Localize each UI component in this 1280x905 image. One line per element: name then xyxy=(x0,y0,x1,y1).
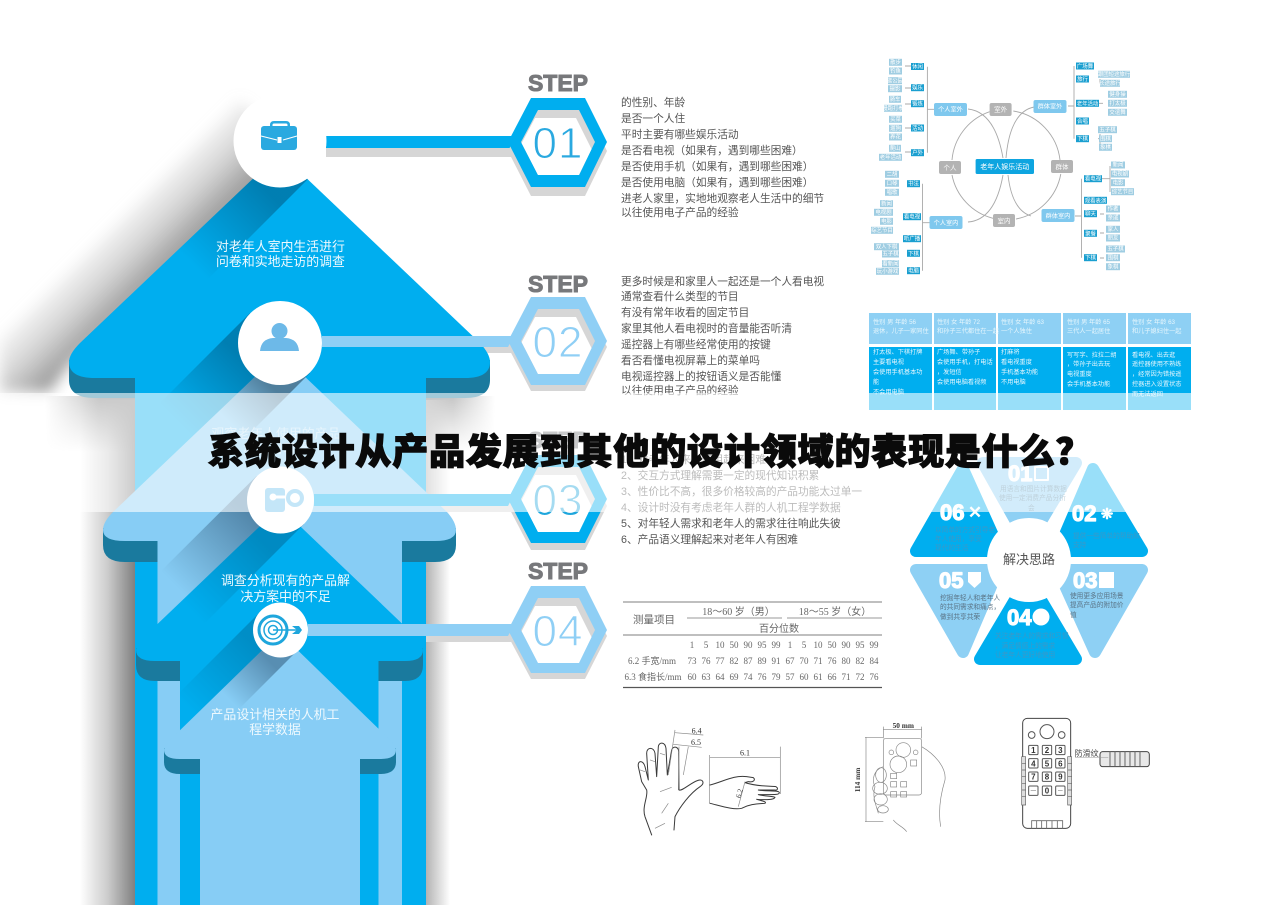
connector 1 xyxy=(326,136,516,148)
remote control drawing: 0 xyxy=(1045,787,1050,796)
wheel descriptions: 用语言和图片计算数据 xyxy=(1000,484,1067,493)
pale leaf labels: 围棋 xyxy=(1108,253,1119,261)
handheld grip drawing: 50 mm xyxy=(893,721,914,730)
wheel descriptions: 使用一定消费产品分析 xyxy=(999,493,1066,502)
arrow text 3 xyxy=(221,573,350,604)
arrow 1 (top, blue) xyxy=(69,153,490,905)
persona header text: 三代人一起居住 xyxy=(1067,327,1110,335)
circle 4 with target icon xyxy=(253,602,308,658)
step 1 hexagon: 01 xyxy=(533,119,583,168)
shadow of circle 3 on arrow 2 xyxy=(170,476,304,588)
segment 01 xyxy=(983,463,1076,543)
arrow 4 (light blue) xyxy=(164,633,396,905)
step 3 list: 1、对老年人来说使用起来困难 xyxy=(621,453,766,466)
persona body text: 会使用电脑看视频 xyxy=(937,378,986,386)
handheld grip drawing: 114 mm xyxy=(853,768,862,792)
pale leaf labels: 打太极 xyxy=(1109,99,1126,107)
measurement table: 76 xyxy=(758,672,767,682)
dark leaf labels: 电脑 xyxy=(908,267,919,275)
step 2 hexagon xyxy=(508,297,607,391)
arrow text 2 (faded) xyxy=(212,426,340,456)
circle 3 with GO key icon xyxy=(247,466,314,534)
dark leaf labels: 户外 xyxy=(912,149,923,157)
pale leaf labels: 亲戚 xyxy=(1108,214,1119,222)
wheel numbers: 01 xyxy=(1008,461,1032,486)
circle 2 with person icon xyxy=(238,301,322,385)
dark leaf labels: 活动 xyxy=(912,124,923,132)
arrow text 4 xyxy=(211,707,340,737)
mind map arcs xyxy=(905,66,1110,271)
persona header text: 一个人独住 xyxy=(1001,327,1032,335)
mind map: elderly leisure activities xyxy=(871,58,1134,275)
pale leaf labels: 电视剧 xyxy=(875,208,892,216)
persona body text: 打麻将 xyxy=(1001,348,1020,356)
light blue node labels xyxy=(934,102,1070,227)
step 1 list: 是否使用手机（如果有，遇到哪些困难） xyxy=(621,160,813,173)
dark leaf labels: 聚餐 xyxy=(1085,229,1096,237)
measurement table: 测量项目 xyxy=(633,613,675,626)
remote control drawing xyxy=(1022,718,1149,828)
step 1 list: 的性别、年龄 xyxy=(621,96,685,109)
step 2 hexagon: 02 xyxy=(533,318,583,367)
step 2 list: 有没有常年收看的固定节目 xyxy=(621,306,749,319)
step 4 label: STEP xyxy=(528,558,588,584)
measurement table: 18～55 岁（女） xyxy=(799,605,871,618)
pale leaf labels: 遛狗 xyxy=(890,124,901,132)
step 3 label: STEP xyxy=(528,427,588,453)
wheel descriptions: 关注老年人的需求和习惯 xyxy=(995,631,1069,640)
dark leaf labels: 合唱 xyxy=(1077,117,1088,125)
pale leaf labels: 家人 xyxy=(1108,225,1119,233)
pale leaf labels: 新闻 xyxy=(1113,161,1123,169)
measurement table: 99 xyxy=(870,640,879,650)
wheel numbers: 04 xyxy=(1007,605,1032,630)
light blue node labels: 个人室内 xyxy=(934,219,958,227)
arrow drop shadows xyxy=(0,100,496,905)
remote control drawing: 8 xyxy=(1045,773,1050,782)
wheel descriptions: 现代的生活 xyxy=(935,543,969,552)
pale leaf labels: 朋友 xyxy=(1108,234,1119,242)
dark leaf labels: 老年活动 xyxy=(1077,99,1099,107)
segment 06 xyxy=(916,469,1000,551)
step 1 list xyxy=(621,96,824,219)
step 1 hexagon xyxy=(508,98,607,196)
pale leaf labels: 综艺节目 xyxy=(871,226,893,234)
dark leaf labels: 观看表演 xyxy=(1085,196,1107,204)
dark leaf labels: 广场舞 xyxy=(1077,62,1094,70)
wheel descriptions: 支持 xyxy=(1073,540,1087,549)
remote control drawing: 防滑纹 xyxy=(1075,748,1099,758)
wheel descriptions: 挖掘年轻人和老年人 xyxy=(940,593,1000,602)
pale leaf labels: 作者 xyxy=(1108,205,1119,213)
measurement table: 70 xyxy=(800,656,809,666)
measurement table: 50 xyxy=(730,640,739,650)
wheel descriptions: 让老年人更好地使用 xyxy=(995,650,1055,659)
pale leaf labels: 电影 xyxy=(1113,178,1124,186)
measurement table: 76 xyxy=(828,656,837,666)
persona body text: 写写字、拉拉二胡 xyxy=(1067,351,1116,359)
pale leaf labels: 养花 xyxy=(890,133,901,141)
wheel numbers: 03 xyxy=(1073,568,1097,593)
measurement table: 69 xyxy=(730,672,739,682)
measurement table: 1 xyxy=(690,640,694,650)
arrow text 2 (faded): 和使用习惯 xyxy=(244,441,308,456)
step 1 list: 是否一个人住 xyxy=(621,112,685,125)
remote control drawing: 4 xyxy=(1031,759,1036,768)
measurement table: 10 xyxy=(716,640,725,650)
remote control drawing: 9 xyxy=(1058,773,1063,782)
pale leaf labels: 玩小游戏 xyxy=(877,267,899,275)
wheel numbers: ✕ xyxy=(968,503,982,522)
connector shadows xyxy=(326,148,516,642)
connector 4 xyxy=(308,624,516,636)
measurement table: 91 xyxy=(772,656,780,666)
remote control drawing: 2 xyxy=(1045,746,1050,755)
persona body text xyxy=(873,348,1182,398)
persona body text: 手机基本功能 xyxy=(1001,368,1038,376)
arrow text 3: 调查分析现有的产品解 xyxy=(221,573,350,588)
wheel numbers: 05 xyxy=(939,568,963,593)
pale leaf labels: 二胡 xyxy=(887,170,897,178)
wheel numbers xyxy=(939,461,1114,630)
persona header text: 性别 男 年龄 56 xyxy=(873,318,917,326)
dark leaf labels: 下棋 xyxy=(1085,254,1096,262)
dark leaf labels: 看电视 xyxy=(904,213,921,221)
persona header text: 性别 女 年龄 63 xyxy=(1001,318,1045,326)
central node: 老年人娱乐活动 xyxy=(980,162,1029,171)
remote control drawing: 3 xyxy=(1058,746,1063,755)
persona body text: 广场舞、带孙子 xyxy=(937,348,980,356)
wheel numbers: 02 xyxy=(1072,501,1096,526)
persona body text: ，发短信 xyxy=(937,368,962,376)
wheel hub xyxy=(987,518,1071,602)
measurement table: 76 xyxy=(702,656,711,666)
circle 1 with briefcase icon xyxy=(234,94,326,188)
pale leaf labels: 象棋 xyxy=(1108,262,1119,270)
light blue node labels: 个人室外 xyxy=(938,106,963,114)
step 2 list: 遥控器上有哪些经常使用的按键 xyxy=(621,338,771,351)
step 1 label: STEP xyxy=(528,70,588,96)
hand measurement drawing: 6.5 xyxy=(691,738,701,747)
dark leaf labels: 下棋 xyxy=(908,249,919,257)
remote control drawing: 6 xyxy=(1058,759,1063,768)
arrow text 3: 决方案中的不足 xyxy=(240,589,331,604)
measurement table: 87 xyxy=(744,656,753,666)
dark leaf labels xyxy=(904,62,1107,275)
arrow text 1: 问卷和实地走访的调查 xyxy=(216,254,345,269)
persona body text: 电视重度 xyxy=(1067,370,1092,378)
measurement table: 百分位数 xyxy=(759,622,799,635)
step 2 list: 更多时候是和家里人一起还是一个人看电视 xyxy=(621,275,824,288)
shadow of circle 3 on arrow 3 xyxy=(195,526,301,612)
step 3 list: 5、对年轻人需求和老年人的需求往往响此失彼 xyxy=(621,517,841,530)
measurement table xyxy=(623,602,882,688)
pale leaf nodes xyxy=(871,59,1134,275)
pale leaf labels: 爬山 xyxy=(890,144,900,152)
wheel descriptions xyxy=(935,484,1140,659)
measurement table: 18～60 岁（男） xyxy=(702,605,775,618)
persona body text: ，经常因为错按遥 xyxy=(1132,370,1182,378)
pale leaf labels: 五子棋 xyxy=(1107,245,1124,253)
arrow text 4: 程学数据 xyxy=(249,722,301,737)
pale leaf labels: 新闻 xyxy=(881,199,892,207)
measurement table: 10 xyxy=(814,640,823,650)
pale leaf labels: 买菜 xyxy=(890,115,901,123)
persona header cells xyxy=(869,313,1191,344)
measurement table: 77 xyxy=(716,656,725,666)
measurement table: 6.2 手宽/mm xyxy=(628,655,676,666)
pale leaf labels: 看新闻 xyxy=(882,259,899,267)
measurement table: 63 xyxy=(702,672,711,682)
wheel numbers: ❋ xyxy=(1101,506,1114,523)
pale leaf labels: 摄影 xyxy=(890,84,901,92)
persona body text: 遥控器使用不熟练 xyxy=(1132,360,1182,368)
pale leaf labels: 跟团短途旅行 xyxy=(1098,70,1131,78)
pale leaf labels: 逛公园 xyxy=(887,76,903,84)
step 2 list: 电视遥控器上的按钮语义是否能懂 xyxy=(621,370,782,383)
pale leaf labels: 唱歌 xyxy=(887,188,898,196)
persona body text: 会使用手机，打电话 xyxy=(937,358,993,366)
remote control drawing: 5 xyxy=(1045,759,1050,768)
measurement table: 66 xyxy=(828,672,837,682)
measurement table: 60 xyxy=(800,672,809,682)
pale leaf labels: 五子棋 xyxy=(882,250,899,258)
measurement table: 60 xyxy=(688,672,697,682)
dark leaf labels: 旅行 xyxy=(1077,75,1088,83)
title: 系统设计从产品发展到其他的设计领域的表现是什么？ xyxy=(208,431,1092,472)
long shadow of circle 2 xyxy=(170,313,310,414)
persona body text: 会手机基本功能 xyxy=(1067,380,1110,388)
long shadow of circle 1 xyxy=(189,178,308,270)
step 2 list: 以往使用电子产品的经验 xyxy=(621,384,739,397)
pale leaf labels: 电视剧 xyxy=(1112,170,1128,178)
wheel descriptions: 的共同需求和痛点， xyxy=(940,602,1000,611)
wheel descriptions: 提高产品的附加价 xyxy=(1070,600,1124,609)
persona body text: 会使用手机基本功 xyxy=(873,368,922,376)
step 2 list xyxy=(621,275,824,397)
dark leaf labels: 听广播 xyxy=(904,235,921,243)
persona header text: 和孙子三代都住在一起 xyxy=(937,327,999,335)
handheld grip drawing xyxy=(853,721,945,832)
measurement table: 82 xyxy=(730,656,738,666)
hand measurement drawing: 6.1 xyxy=(740,748,750,757)
persona body text: 打太极、下棋打牌 xyxy=(873,348,922,356)
step 3 hexagon xyxy=(508,455,607,550)
pale leaf labels: 健身操 xyxy=(1109,90,1126,98)
pale leaf labels: 钓鱼 xyxy=(890,67,901,75)
wheel descriptions: ，满足情感上的需求 xyxy=(995,641,1055,650)
persona header text: 性别 男 年龄 65 xyxy=(1067,318,1111,326)
light blue nodes xyxy=(930,100,1074,229)
pale leaf labels: 围棋 xyxy=(1100,134,1111,142)
step 3 list: 3、性价比不高，很多价格较高的产品功能太过单一 xyxy=(621,485,862,498)
step 1 list: 平时主要有哪些娱乐活动 xyxy=(621,128,739,141)
pale leaf labels: 五子棋 xyxy=(1099,125,1116,133)
grey node labels: 群体 xyxy=(1056,162,1069,171)
grey node labels xyxy=(944,104,1069,225)
persona header text xyxy=(873,318,1182,335)
measurement table: 67 xyxy=(786,656,795,666)
step 2 label: STEP xyxy=(528,271,588,297)
dark leaf labels: 休闲 xyxy=(912,62,923,70)
step 3 list: 4、设计时没有考虑老年人群的人机工程学数据 xyxy=(621,501,841,514)
dark leaf labels: 看电视 xyxy=(1085,175,1102,183)
measurement table: 64 xyxy=(716,672,725,682)
step 2 list: 家里其他人看电视时的音量能否听清 xyxy=(621,322,792,335)
step 3 list xyxy=(621,453,862,546)
pale leaf labels: 散步 xyxy=(890,58,901,66)
arrow text 1 xyxy=(216,239,345,269)
wheel descriptions: 年人使用，享受 xyxy=(935,534,982,543)
wheel descriptions: 提供一些简单的帮助和 xyxy=(1073,531,1140,540)
dark leaf labels: 娱乐 xyxy=(912,84,923,92)
persona header text: 退休，儿子一家同住 xyxy=(873,327,929,335)
pale leaf labels: 综艺节目 xyxy=(1112,187,1133,195)
dark leaf labels: 书法 xyxy=(908,180,919,188)
measurement table: 1 xyxy=(788,640,792,650)
connector 3 xyxy=(314,494,516,506)
remote control drawing: 1 xyxy=(1031,746,1036,755)
step 1 list: 进老人家里，实地地观察老人生活中的细节 xyxy=(621,192,824,205)
wheel descriptions: 以简单的方式引导老 xyxy=(935,525,995,534)
pale leaf labels: 老年活动 xyxy=(880,153,902,161)
grey nodes xyxy=(939,103,1073,227)
translucent title band xyxy=(0,393,1280,512)
measurement table: 95 xyxy=(856,640,865,650)
measurement table: 90 xyxy=(842,640,851,650)
persona body text: 看电视重度 xyxy=(1001,358,1032,366)
measurement table: 89 xyxy=(758,656,767,666)
step 4 hexagon: 04 xyxy=(533,607,583,656)
step 2 list: 看否看懂电视屏幕上的菜单吗 xyxy=(621,354,760,367)
pale leaf labels: 长途旅行 xyxy=(1099,79,1121,87)
pale leaf labels: 象棋 xyxy=(1100,143,1111,151)
persona body text: 主要看电视 xyxy=(873,358,904,366)
wheel numbers: 06 xyxy=(940,500,964,525)
segment 03 xyxy=(1058,570,1142,652)
measurement table: 61 xyxy=(814,672,822,682)
step 1 list: 是否使用电脑（如果有，遇到哪些困难） xyxy=(621,176,813,189)
segment 05 xyxy=(916,570,998,652)
arrow text 2 (faded): 观察老年人使用的产品 xyxy=(212,426,340,441)
persona body text: ，带孙子出去玩 xyxy=(1067,360,1111,368)
light blue node labels: 群体室内 xyxy=(1046,212,1070,220)
step 3 hexagon: 03 xyxy=(533,476,583,525)
measurement table: 5 xyxy=(704,640,709,650)
persona body text: 不用电脑 xyxy=(1001,378,1026,386)
step 1 list: 是否看电视（如果有，遇到哪些困难） xyxy=(621,144,803,157)
measurement table: 84 xyxy=(870,656,879,666)
measurement table: 73 xyxy=(688,656,697,666)
hand measurement drawing xyxy=(638,726,780,835)
dark leaf labels: 下棋 xyxy=(1077,135,1088,143)
segment 04 xyxy=(980,578,1076,659)
pale leaf labels: 骑车 xyxy=(890,95,901,103)
arrow text 1: 对老年人室内生活进行 xyxy=(216,239,345,254)
measurement table: 76 xyxy=(870,672,879,682)
persona body text: 而无法返回 xyxy=(1132,390,1163,398)
shadow of circle 4 on arrow 3 xyxy=(189,614,262,702)
persona body text: 不会用电脑 xyxy=(873,388,904,396)
measurement table: 57 xyxy=(786,672,795,682)
central node xyxy=(976,159,1034,174)
step 1 list: 以往使用电子产品的经验 xyxy=(621,206,739,219)
shadow of circle 2 on arrow 2 xyxy=(228,376,306,428)
measurement table: 6.3 食指长/mm xyxy=(624,671,682,682)
measurement table: 95 xyxy=(758,640,767,650)
solution wheel xyxy=(916,463,1142,659)
measurement table: 74 xyxy=(744,672,753,682)
pale leaf labels: 双人下棋 xyxy=(876,242,898,250)
measurement table: 72 xyxy=(856,672,864,682)
persona header text: 性别 女 年龄 72 xyxy=(937,318,981,326)
measurement table: 79 xyxy=(772,672,781,682)
pale leaf labels: 电影 xyxy=(881,217,892,225)
measurement table: 50 xyxy=(828,640,837,650)
hand measurement drawing: 6.4 xyxy=(692,726,702,735)
arrow 2 (light blue) xyxy=(103,353,456,905)
arrow 3 (blue) xyxy=(136,507,423,905)
wheel descriptions: 做到共享共荣 xyxy=(940,612,980,621)
step 4 hexagon xyxy=(508,586,607,679)
measurement table: 71 xyxy=(842,672,850,682)
connector 2 xyxy=(322,336,516,347)
wheel descriptions: 值 xyxy=(1070,610,1077,619)
measurement table: 71 xyxy=(814,656,822,666)
pale leaf labels: 交谊舞 xyxy=(1109,108,1126,116)
measurement table: 90 xyxy=(744,640,753,650)
grey node labels: 室外 xyxy=(994,104,1008,114)
pale leaf labels xyxy=(871,58,1133,275)
hand measurement drawing: 6.2 xyxy=(734,787,745,799)
persona header text: 和儿子媳妇住一起 xyxy=(1132,327,1182,335)
measurement table: 82 xyxy=(856,656,864,666)
wheel descriptions: 会 xyxy=(1028,503,1035,512)
persona body text: 能 xyxy=(873,378,879,386)
measurement table: 99 xyxy=(772,640,781,650)
grey node labels: 个人 xyxy=(944,164,957,172)
persona body text: 看电视、出去逛 xyxy=(1132,351,1175,359)
persona body cells xyxy=(869,347,1191,410)
persona header text: 性别 女 年龄 63 xyxy=(1132,318,1176,326)
pale leaf labels: 口琴 xyxy=(887,180,898,187)
step 2 list: 通常查看什么类型的节目 xyxy=(621,290,739,303)
measurement table: 80 xyxy=(842,656,851,666)
persona body text: 控器进入设置状态 xyxy=(1132,380,1182,388)
remote control drawing: 7 xyxy=(1031,773,1036,782)
light blue node labels: 群体室外 xyxy=(1038,102,1062,110)
arrow text 4: 产品设计相关的人机工 xyxy=(211,707,340,722)
pale leaf labels: 慢跑打拳 xyxy=(882,104,904,112)
shadow of circle 4 on arrow 4 xyxy=(226,650,294,704)
wheel descriptions: 使用更多应用场景 xyxy=(1070,591,1124,600)
step 3 list: 6、产品语义理解起来对老年人有困难 xyxy=(621,533,798,546)
dark leaf labels: 锻炼 xyxy=(912,100,923,108)
measurement table: 5 xyxy=(802,640,807,650)
wheel hub label: 解决思路 xyxy=(1003,552,1055,567)
persona table xyxy=(869,313,1191,410)
grey node labels: 室内 xyxy=(998,216,1010,225)
dark leaf nodes xyxy=(903,62,1107,274)
segment 02 xyxy=(1058,469,1142,551)
step 3 list: 2、交互方式理解需要一定的现代知识积累 xyxy=(621,469,819,482)
dark leaf labels: 聊天 xyxy=(1085,210,1096,218)
